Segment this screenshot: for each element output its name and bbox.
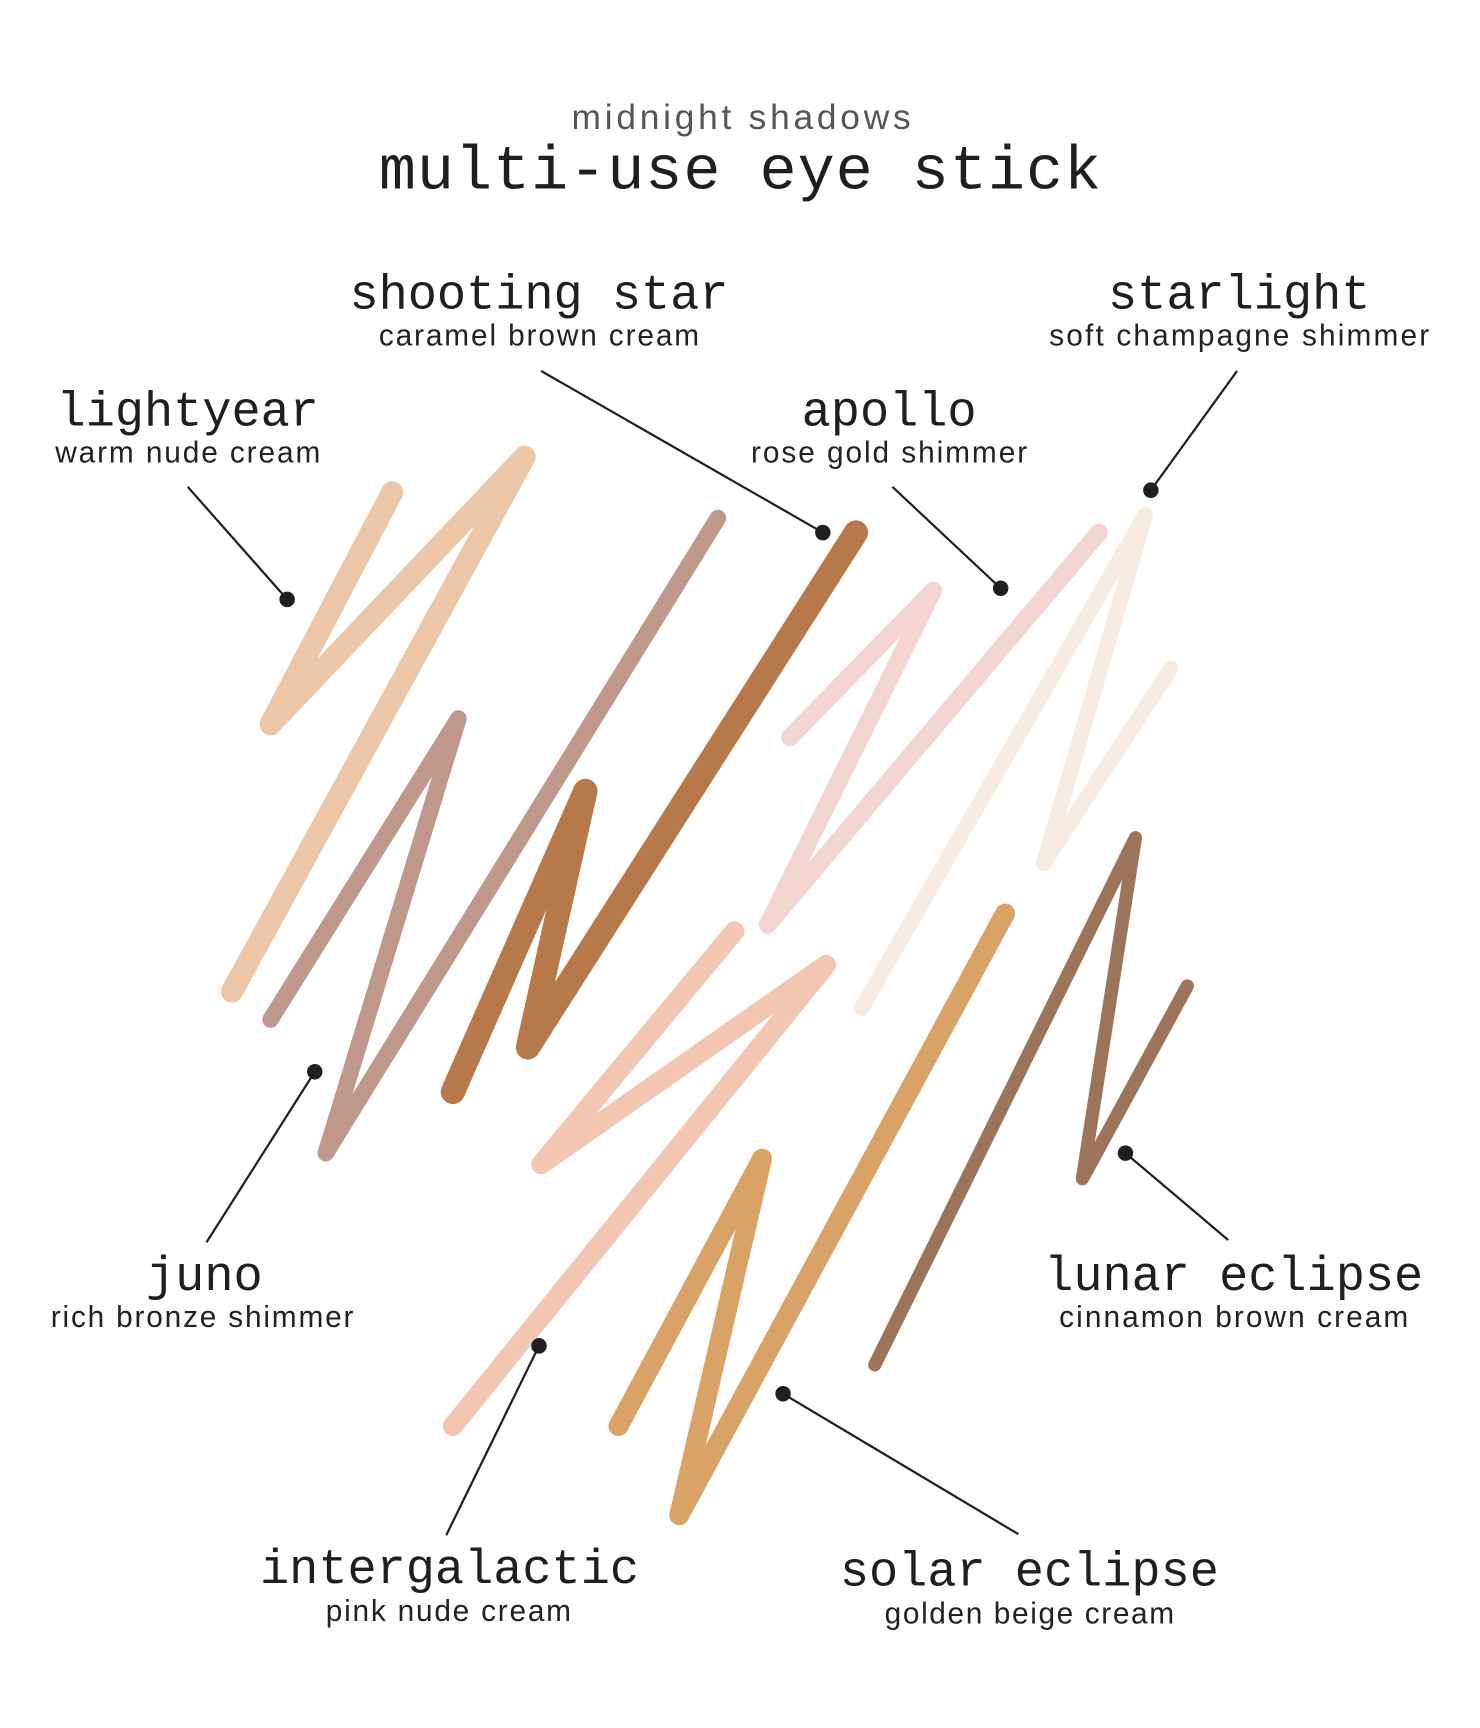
label: apollo: rose gold shimmer xyxy=(751,436,1027,469)
label: solar eclipse: golden beige cream xyxy=(885,1597,1174,1630)
title xyxy=(379,97,1101,207)
swatch: apollo xyxy=(768,533,1099,925)
swatch: lightyear xyxy=(232,457,525,992)
label: apollo: apollo xyxy=(802,384,977,441)
swatch: solar eclipse xyxy=(619,914,1005,1515)
label: lunar eclipse xyxy=(1044,1145,1423,1334)
label: intergalactic xyxy=(260,1338,639,1628)
swatch: juno xyxy=(271,518,718,1153)
swatch: starlight xyxy=(861,515,1171,1008)
label: lightyear: lightyear xyxy=(57,384,319,441)
label: shooting star xyxy=(349,267,831,540)
label: lightyear: warm nude cream xyxy=(54,436,320,469)
swatch: intergalactic xyxy=(453,931,826,1426)
title: midnight shadows xyxy=(572,97,911,137)
label: starlight: soft champagne shimmer xyxy=(1049,319,1429,352)
label: juno: juno xyxy=(146,1249,263,1305)
label: juno: rich bronze shimmer xyxy=(51,1301,353,1334)
label: intergalactic: pink nude cream xyxy=(326,1595,571,1628)
title: multi-use eye stick xyxy=(379,136,1101,207)
label: starlight xyxy=(1049,267,1429,498)
label: lightyear xyxy=(54,384,320,607)
swatches xyxy=(232,457,1187,1515)
label: solar eclipse xyxy=(775,1386,1219,1630)
label: shooting star: shooting star xyxy=(349,267,728,324)
label: shooting star: caramel brown cream xyxy=(379,319,699,352)
label: lunar eclipse: cinnamon brown cream xyxy=(1059,1301,1408,1334)
label: apollo xyxy=(751,384,1027,596)
label: juno xyxy=(51,1064,353,1334)
label: lunar eclipse: lunar eclipse xyxy=(1044,1249,1423,1305)
swatch: lunar eclipse xyxy=(875,838,1187,1365)
swatch: shooting star xyxy=(453,533,856,1092)
label: solar eclipse: solar eclipse xyxy=(840,1544,1219,1600)
label: intergalactic: intergalactic xyxy=(260,1542,639,1598)
label: starlight: starlight xyxy=(1108,267,1370,324)
